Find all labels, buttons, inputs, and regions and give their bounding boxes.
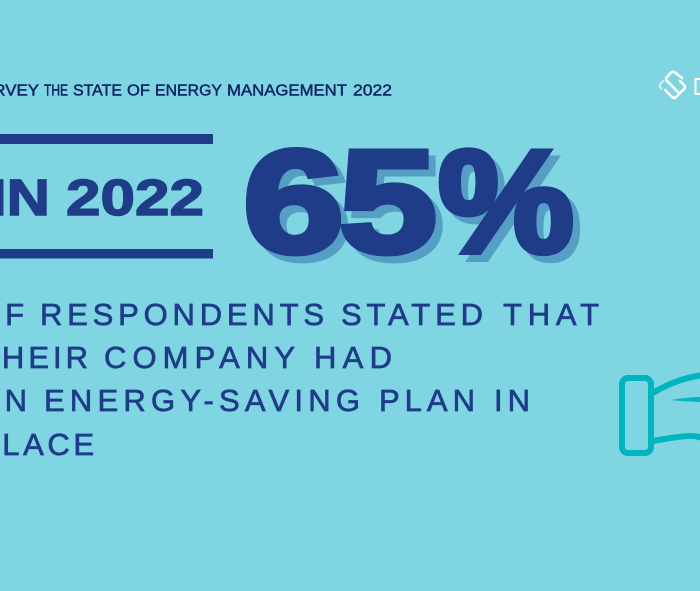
top bar: [0, 134, 213, 144]
statistic figure: 5: [339, 120, 437, 283]
statistic figure: [243, 120, 574, 283]
year text: 2022: [66, 169, 204, 226]
description text: RESPONDENTS: [40, 297, 324, 332]
statistic shadow: 6: [250, 127, 351, 290]
header: survey title: ENERGY: [155, 82, 222, 100]
header: survey title: 2022: [353, 82, 392, 100]
hand bottom: [653, 436, 700, 441]
cuff: [622, 378, 651, 453]
description text: IN: [494, 383, 530, 418]
description text: PLAN: [379, 383, 475, 418]
header: survey title: THE: [44, 82, 68, 100]
icon: brand logo: [660, 72, 700, 98]
icon: hand holding: [622, 375, 700, 453]
description text: [0, 297, 599, 462]
description text: COMPANY: [104, 340, 295, 375]
statistic shadow: %: [445, 127, 581, 290]
bottom bar: [0, 249, 213, 258]
statistic figure: 6: [243, 120, 344, 283]
statistic figure: %: [438, 120, 574, 283]
header: survey title: STATE: [73, 82, 122, 100]
description text: ENERGY-SAVING: [44, 383, 360, 418]
statistic shadow: [250, 127, 581, 290]
statistic shadow: 5: [346, 127, 444, 290]
header: survey title: MANAGEMENT: [227, 82, 347, 100]
big statistic 65%: [243, 120, 581, 290]
header: survey title: [0, 82, 392, 100]
finger: [671, 397, 700, 402]
description text: THAT: [503, 297, 599, 332]
year text: [0, 169, 204, 226]
hand top: [653, 375, 700, 393]
description text: HAD: [314, 340, 392, 375]
description text: STATED: [341, 297, 483, 332]
year label with bars: [0, 134, 213, 258]
header: survey title: OF: [127, 82, 150, 100]
